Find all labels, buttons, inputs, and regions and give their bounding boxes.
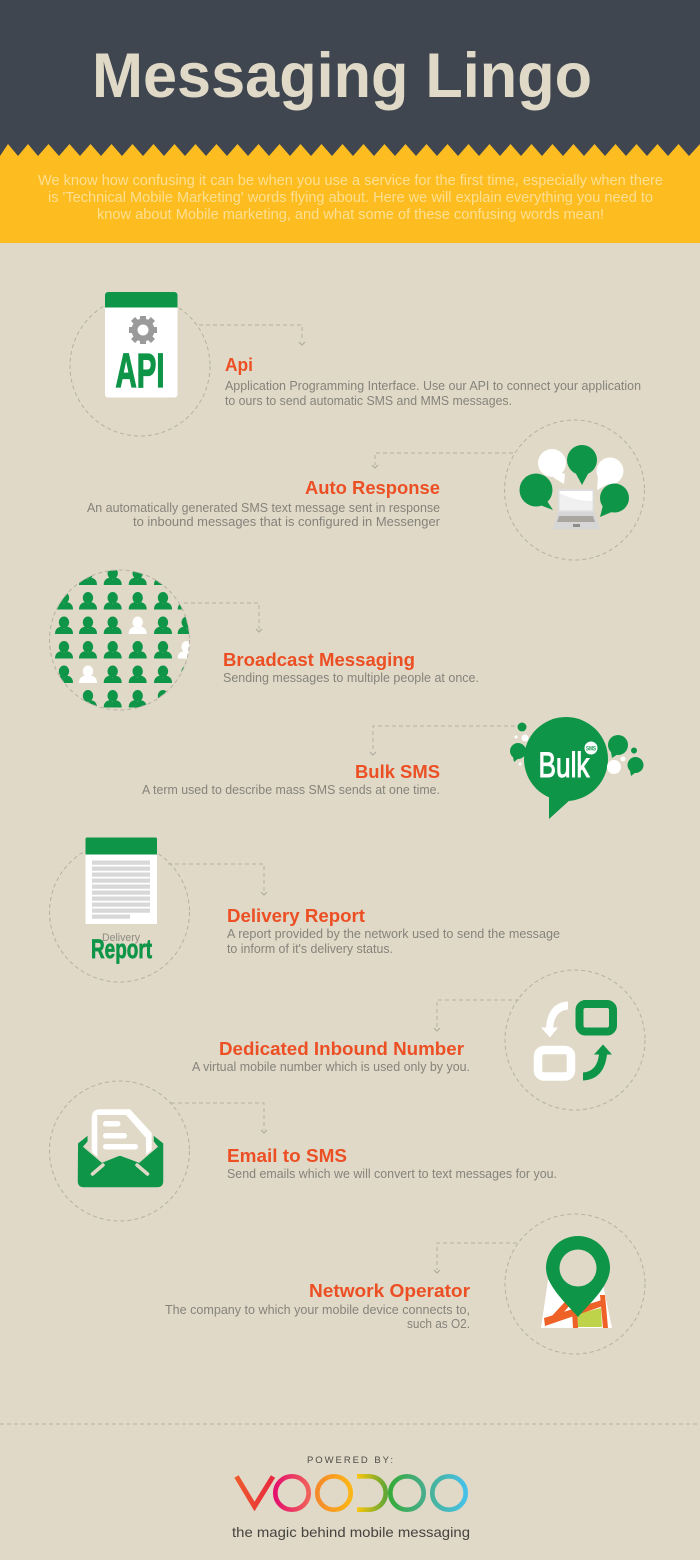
description [225, 379, 641, 408]
title: Messaging Lingo [92, 41, 592, 111]
intro band with zigzag edge [0, 144, 700, 243]
tagline: the magic behind mobile messaging [232, 1524, 470, 1540]
icon: map pin [541, 1236, 612, 1328]
icon: bulk speech bubble: Bulk [538, 746, 590, 785]
icon: bulk speech bubble: SMS [586, 746, 596, 752]
description: A report provided by the network used to send the message [227, 927, 560, 941]
description: to inbound messages that is configured in Messenger [133, 515, 440, 529]
icon: crowd of people [55, 568, 196, 708]
panel: api [70, 292, 641, 436]
panel: email to sms [50, 1081, 557, 1221]
connector arrow [171, 1103, 267, 1133]
connector arrow [184, 603, 262, 632]
connector arrow [168, 864, 267, 895]
panel: network operator [165, 1214, 645, 1354]
description: such as O2. [407, 1317, 470, 1331]
description: Application Programming Interface. Use our API to connect your application [225, 379, 641, 393]
intro text [38, 173, 663, 223]
description: A virtual mobile number which is used only by you. [192, 1060, 470, 1074]
description: to inform of it's delivery status. [227, 942, 393, 956]
connector arrow [370, 726, 515, 755]
description: A term used to describe mass SMS sends at one time. [142, 783, 440, 797]
description: The company to which your mobile device connects to, [165, 1303, 470, 1317]
connector arrow [434, 1000, 519, 1031]
icon: bulk speech bubble [510, 717, 644, 819]
intro text: We know how confusing it can be when you use a service for the first time, especially when there [38, 173, 663, 189]
icon: api card [105, 292, 178, 398]
heading: Delivery Report [227, 906, 365, 926]
panel: delivery report [50, 838, 560, 982]
icon: delivery report document: Delivery [102, 932, 140, 944]
description: to ours to send automatic SMS and MMS messages. [225, 394, 512, 408]
heading: Auto Response [305, 478, 440, 498]
icon: speech bubbles and laptop [520, 445, 629, 529]
connector arrow [199, 325, 305, 345]
voodoo logo [236, 1476, 466, 1510]
description [87, 501, 440, 529]
icon: delivery report document [86, 838, 157, 964]
description [165, 1303, 470, 1331]
icon: api card: API [116, 345, 164, 398]
icon: delivery report document: Report [91, 934, 152, 964]
icon: open envelope with document [77, 1109, 164, 1188]
description: Send emails which we will convert to text messages for you. [227, 1167, 557, 1181]
powered by label: POWERED BY: [307, 1455, 393, 1466]
intro text: is 'Technical Mobile Marketing' words flying about. Here we will explain everything you need to [48, 190, 653, 206]
panel: bulk sms [142, 717, 644, 819]
heading: Broadcast Messaging [223, 650, 415, 670]
panel: auto response [87, 420, 644, 560]
connector arrow [372, 453, 513, 468]
description [227, 927, 560, 956]
footer [232, 1455, 470, 1540]
description: Sending messages to multiple people at once. [223, 671, 479, 685]
header band [0, 0, 700, 156]
heading: Bulk SMS [355, 762, 440, 782]
description: An automatically generated SMS text message sent in response [87, 501, 440, 515]
icon: swap numbers [538, 1002, 613, 1080]
panel: broadcast messaging [50, 568, 479, 710]
heading: Email to SMS [227, 1146, 347, 1166]
intro text: know about Mobile marketing, and what some of these confusing words mean! [97, 207, 604, 223]
panel: dedicated inbound number [192, 970, 645, 1110]
connector arrow [434, 1243, 517, 1273]
heading: Network Operator [309, 1281, 470, 1301]
heading: Api [225, 355, 253, 375]
heading: Dedicated Inbound Number [219, 1039, 464, 1059]
